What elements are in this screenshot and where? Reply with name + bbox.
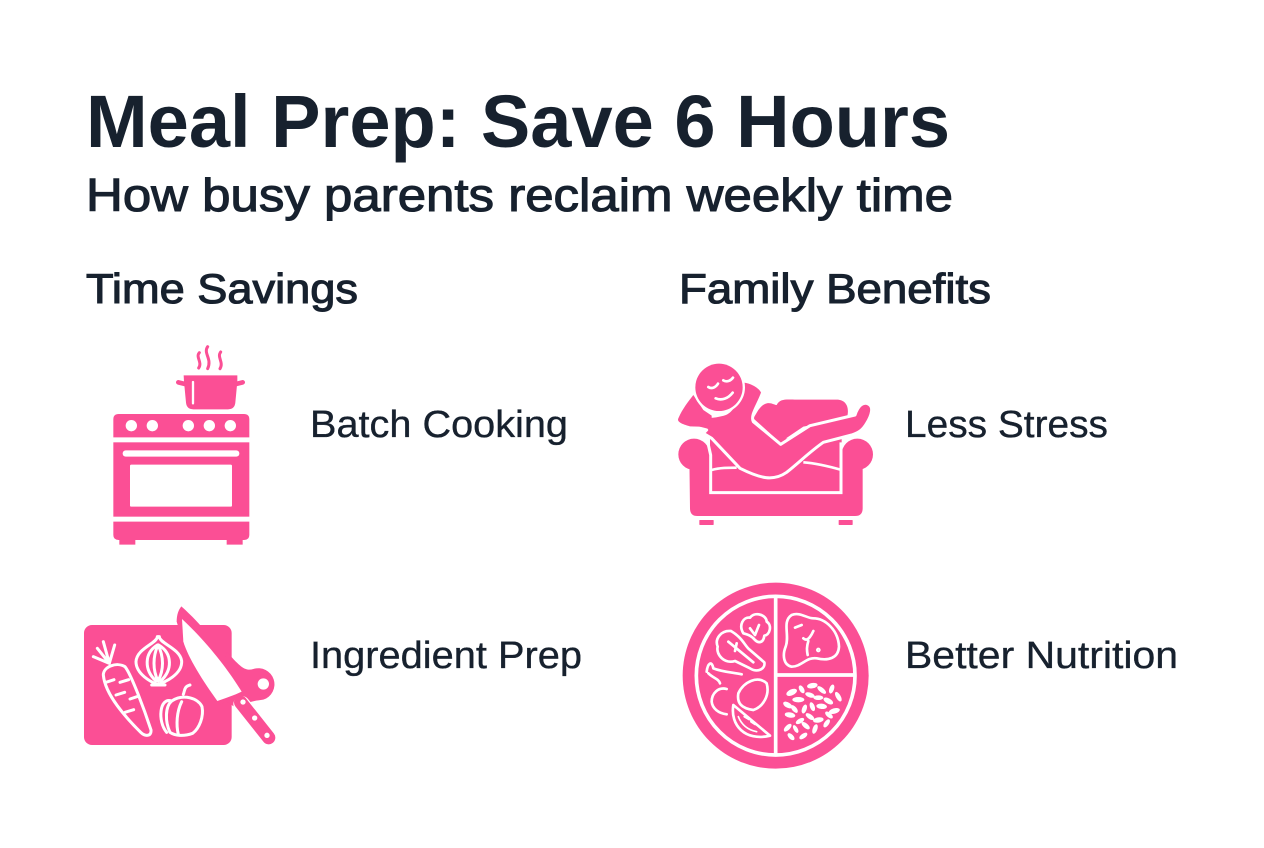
subtitle: How busy parents reclaim weekly time [86, 169, 953, 221]
label: less stress: Less Stress [905, 404, 1108, 446]
icon: person relaxing on sofa [678, 361, 873, 525]
label: better nutrition: Better Nutrition [905, 635, 1178, 677]
rice grains [782, 682, 843, 741]
label: batch cooking: Batch Cooking [310, 404, 568, 446]
title: Meal Prep: Save 6 Hours [86, 80, 950, 163]
label: ingredient prep: Ingredient Prep [310, 635, 582, 677]
heading: family benefits: Family Benefits [679, 265, 991, 312]
icon: stove with steaming pot [113, 347, 249, 545]
icon: nutrition plate [683, 583, 869, 769]
icon: cutting board with vegetables and knife [84, 606, 274, 745]
heading: time savings: Time Savings [86, 265, 358, 312]
